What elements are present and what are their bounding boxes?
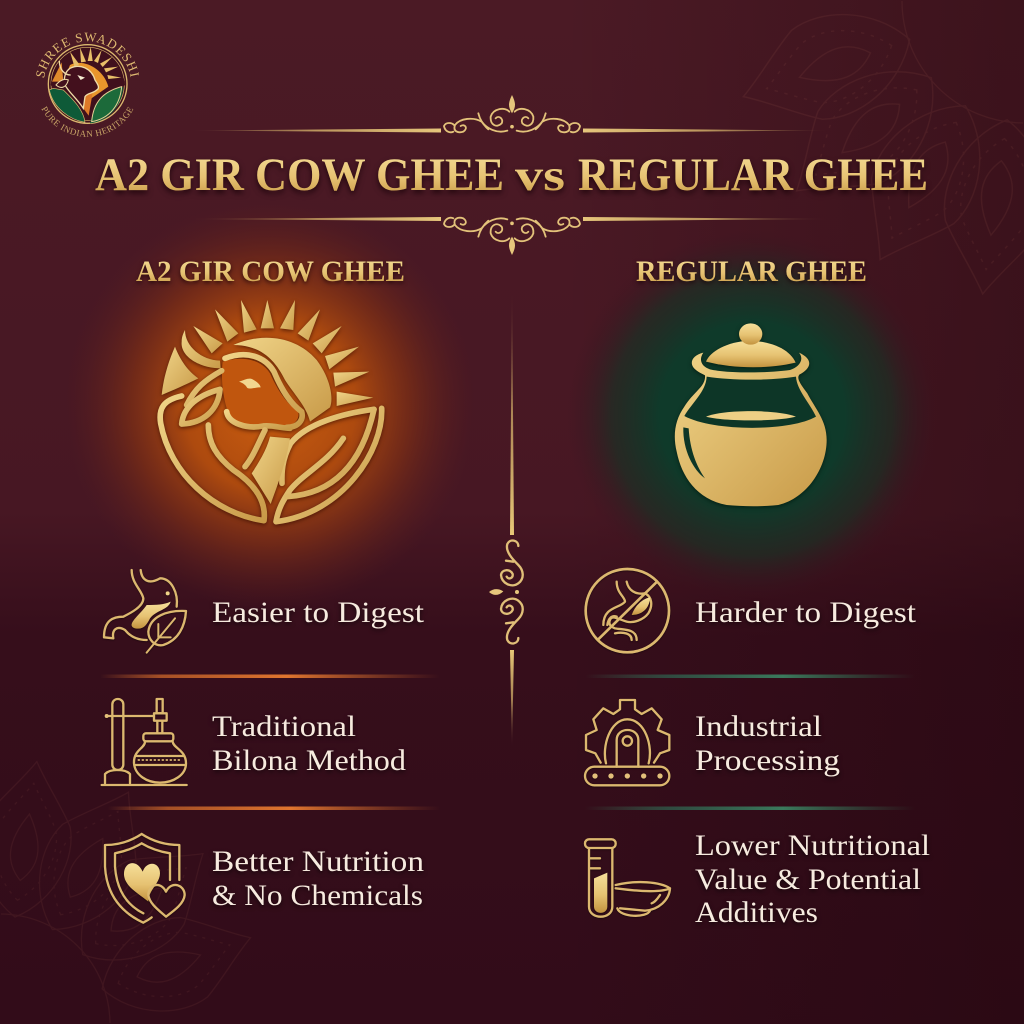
glow: orange (65, 200, 475, 610)
pot interior window (684, 377, 816, 428)
logo text: brand name: SHREE SWADESHI (36, 32, 139, 78)
text: Industrial Processing (695, 710, 840, 777)
text: Easier to Digest: Easier to Digest (212, 596, 425, 629)
icon: crossed-out stomach (586, 569, 669, 652)
sun disc crescent (233, 338, 331, 422)
text: Industrial Processing: Processing (695, 744, 840, 777)
ghee level (706, 411, 796, 420)
logo text: tagline: PURE INDIAN HERITAGE (41, 106, 134, 137)
text: Lower Nutritional Value & Potential Additives (695, 829, 930, 929)
main title: A2 GIR COW GHEE (95, 149, 504, 201)
icon: stomach with leaf (104, 570, 186, 653)
cow outlines (160, 355, 382, 522)
icon: gear and conveyor (585, 700, 669, 785)
lid knob (739, 323, 762, 345)
central divider (489, 290, 523, 748)
title ornament: top (190, 95, 830, 132)
pot body (675, 353, 827, 506)
emblem: cow, sun and leaf (160, 300, 382, 522)
cow head fill (222, 359, 299, 427)
icon: test tube and bowl (585, 839, 670, 917)
text: Lower Nutritional Value & Potential Additives: Additives (695, 896, 818, 929)
column heading: Regular Ghee: REGULAR GHEE (636, 255, 867, 288)
column heading: A2 Gir Cow Ghee: A2 GIR COW GHEE (136, 255, 405, 288)
horn and ear wing (182, 330, 221, 368)
text: Harder to Digest: Harder to Digest (695, 596, 917, 629)
icon: bilona churn (102, 699, 187, 785)
cow chest (252, 437, 290, 504)
text: Traditional Bilona Method (212, 710, 406, 777)
icon: shield with hearts (105, 834, 185, 923)
main title (95, 149, 928, 201)
cow eye (239, 379, 261, 388)
decorative mandala: bottom left (0, 755, 265, 1024)
text: Better Nutrition & No Chemicals (212, 845, 424, 912)
separators: left (100, 674, 440, 810)
text: Traditional Bilona Method: Bilona Method (212, 744, 406, 777)
decorative mandala: top right (727, 0, 1024, 301)
text: Lower Nutritional Value & Potential Additives: Lower Nutritional (695, 829, 930, 862)
text: Lower Nutritional Value & Potential Additives: Value & Potential (695, 863, 921, 896)
main title: vs (515, 151, 565, 200)
pot lid (706, 341, 796, 367)
text: Better Nutrition & No Chemicals: Better Nutrition (212, 845, 424, 878)
text: Traditional Bilona Method: Traditional (212, 710, 356, 743)
separators: right (585, 674, 915, 810)
text: Industrial Processing: Industrial (695, 710, 822, 743)
glow: green (567, 230, 937, 600)
brand logo (36, 32, 139, 137)
text: Better Nutrition & No Chemicals: & No Chemicals (212, 879, 423, 912)
title ornament: bottom (190, 217, 830, 255)
main title: REGULAR GHEE (578, 149, 928, 201)
emblem: ghee pot (675, 323, 827, 506)
sun rays (193, 300, 373, 406)
pot highlight (683, 427, 705, 478)
